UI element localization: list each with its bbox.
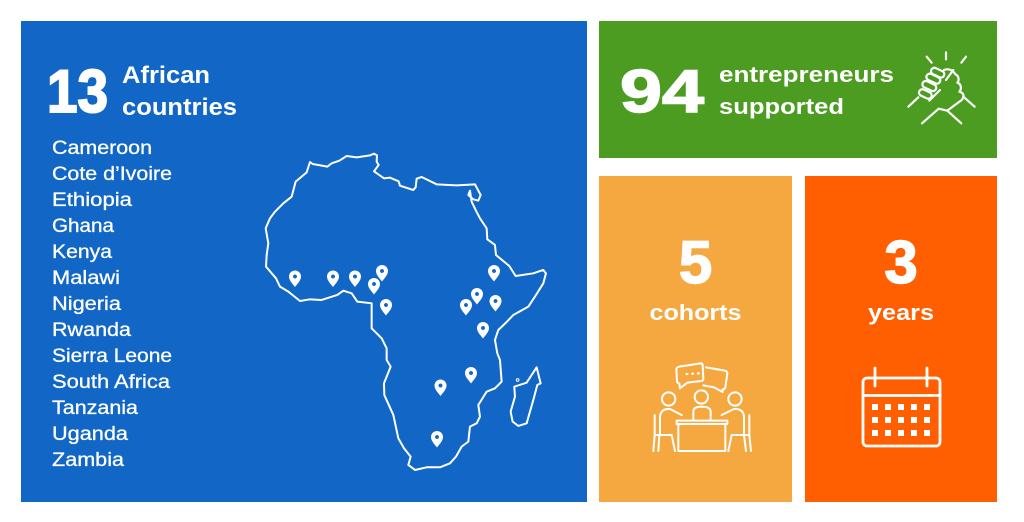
heading: African countries: [122, 62, 237, 121]
panel: entrepreneurs supported: [599, 21, 997, 158]
label: entrepreneurs supported: entrepreneurs: [719, 62, 894, 87]
country list: Ethiopia: [52, 190, 132, 211]
label: entrepreneurs supported: supported: [719, 94, 844, 119]
big number 3: 3: [884, 229, 918, 296]
big number 94: 94: [620, 58, 705, 125]
map of Africa: [266, 154, 546, 470]
country list: Nigeria: [52, 294, 121, 315]
country list: Ghana: [52, 216, 114, 237]
icon: calendar: [863, 368, 940, 446]
country list: Zambia: [52, 450, 124, 471]
big number 5: 5: [679, 229, 712, 296]
big number 13: 13: [47, 58, 108, 125]
panel: African countries: [21, 21, 587, 502]
country list: Malawi: [52, 268, 120, 289]
country list: Kenya: [52, 242, 112, 263]
heading: African countries: African: [122, 62, 210, 89]
heading: African countries: countries: [122, 94, 237, 121]
map pins: [289, 265, 502, 448]
country list: Sierra Leone: [52, 346, 172, 367]
icon: meeting: [653, 363, 751, 451]
label: years: years: [868, 300, 934, 325]
country list: Cameroon: [52, 138, 152, 159]
label: entrepreneurs supported: [719, 62, 894, 119]
label: cohorts: cohorts: [650, 300, 742, 325]
country list: Rwanda: [52, 320, 131, 341]
country list: [52, 138, 172, 471]
country list: Tanzania: [52, 398, 138, 419]
panel: cohorts: [599, 176, 792, 502]
panel: years: [805, 176, 997, 502]
icon: handshake: [908, 52, 975, 123]
country list: South Africa: [52, 372, 170, 393]
country list: Cote d’Ivoire: [52, 164, 172, 185]
country list: Uganda: [52, 424, 128, 445]
